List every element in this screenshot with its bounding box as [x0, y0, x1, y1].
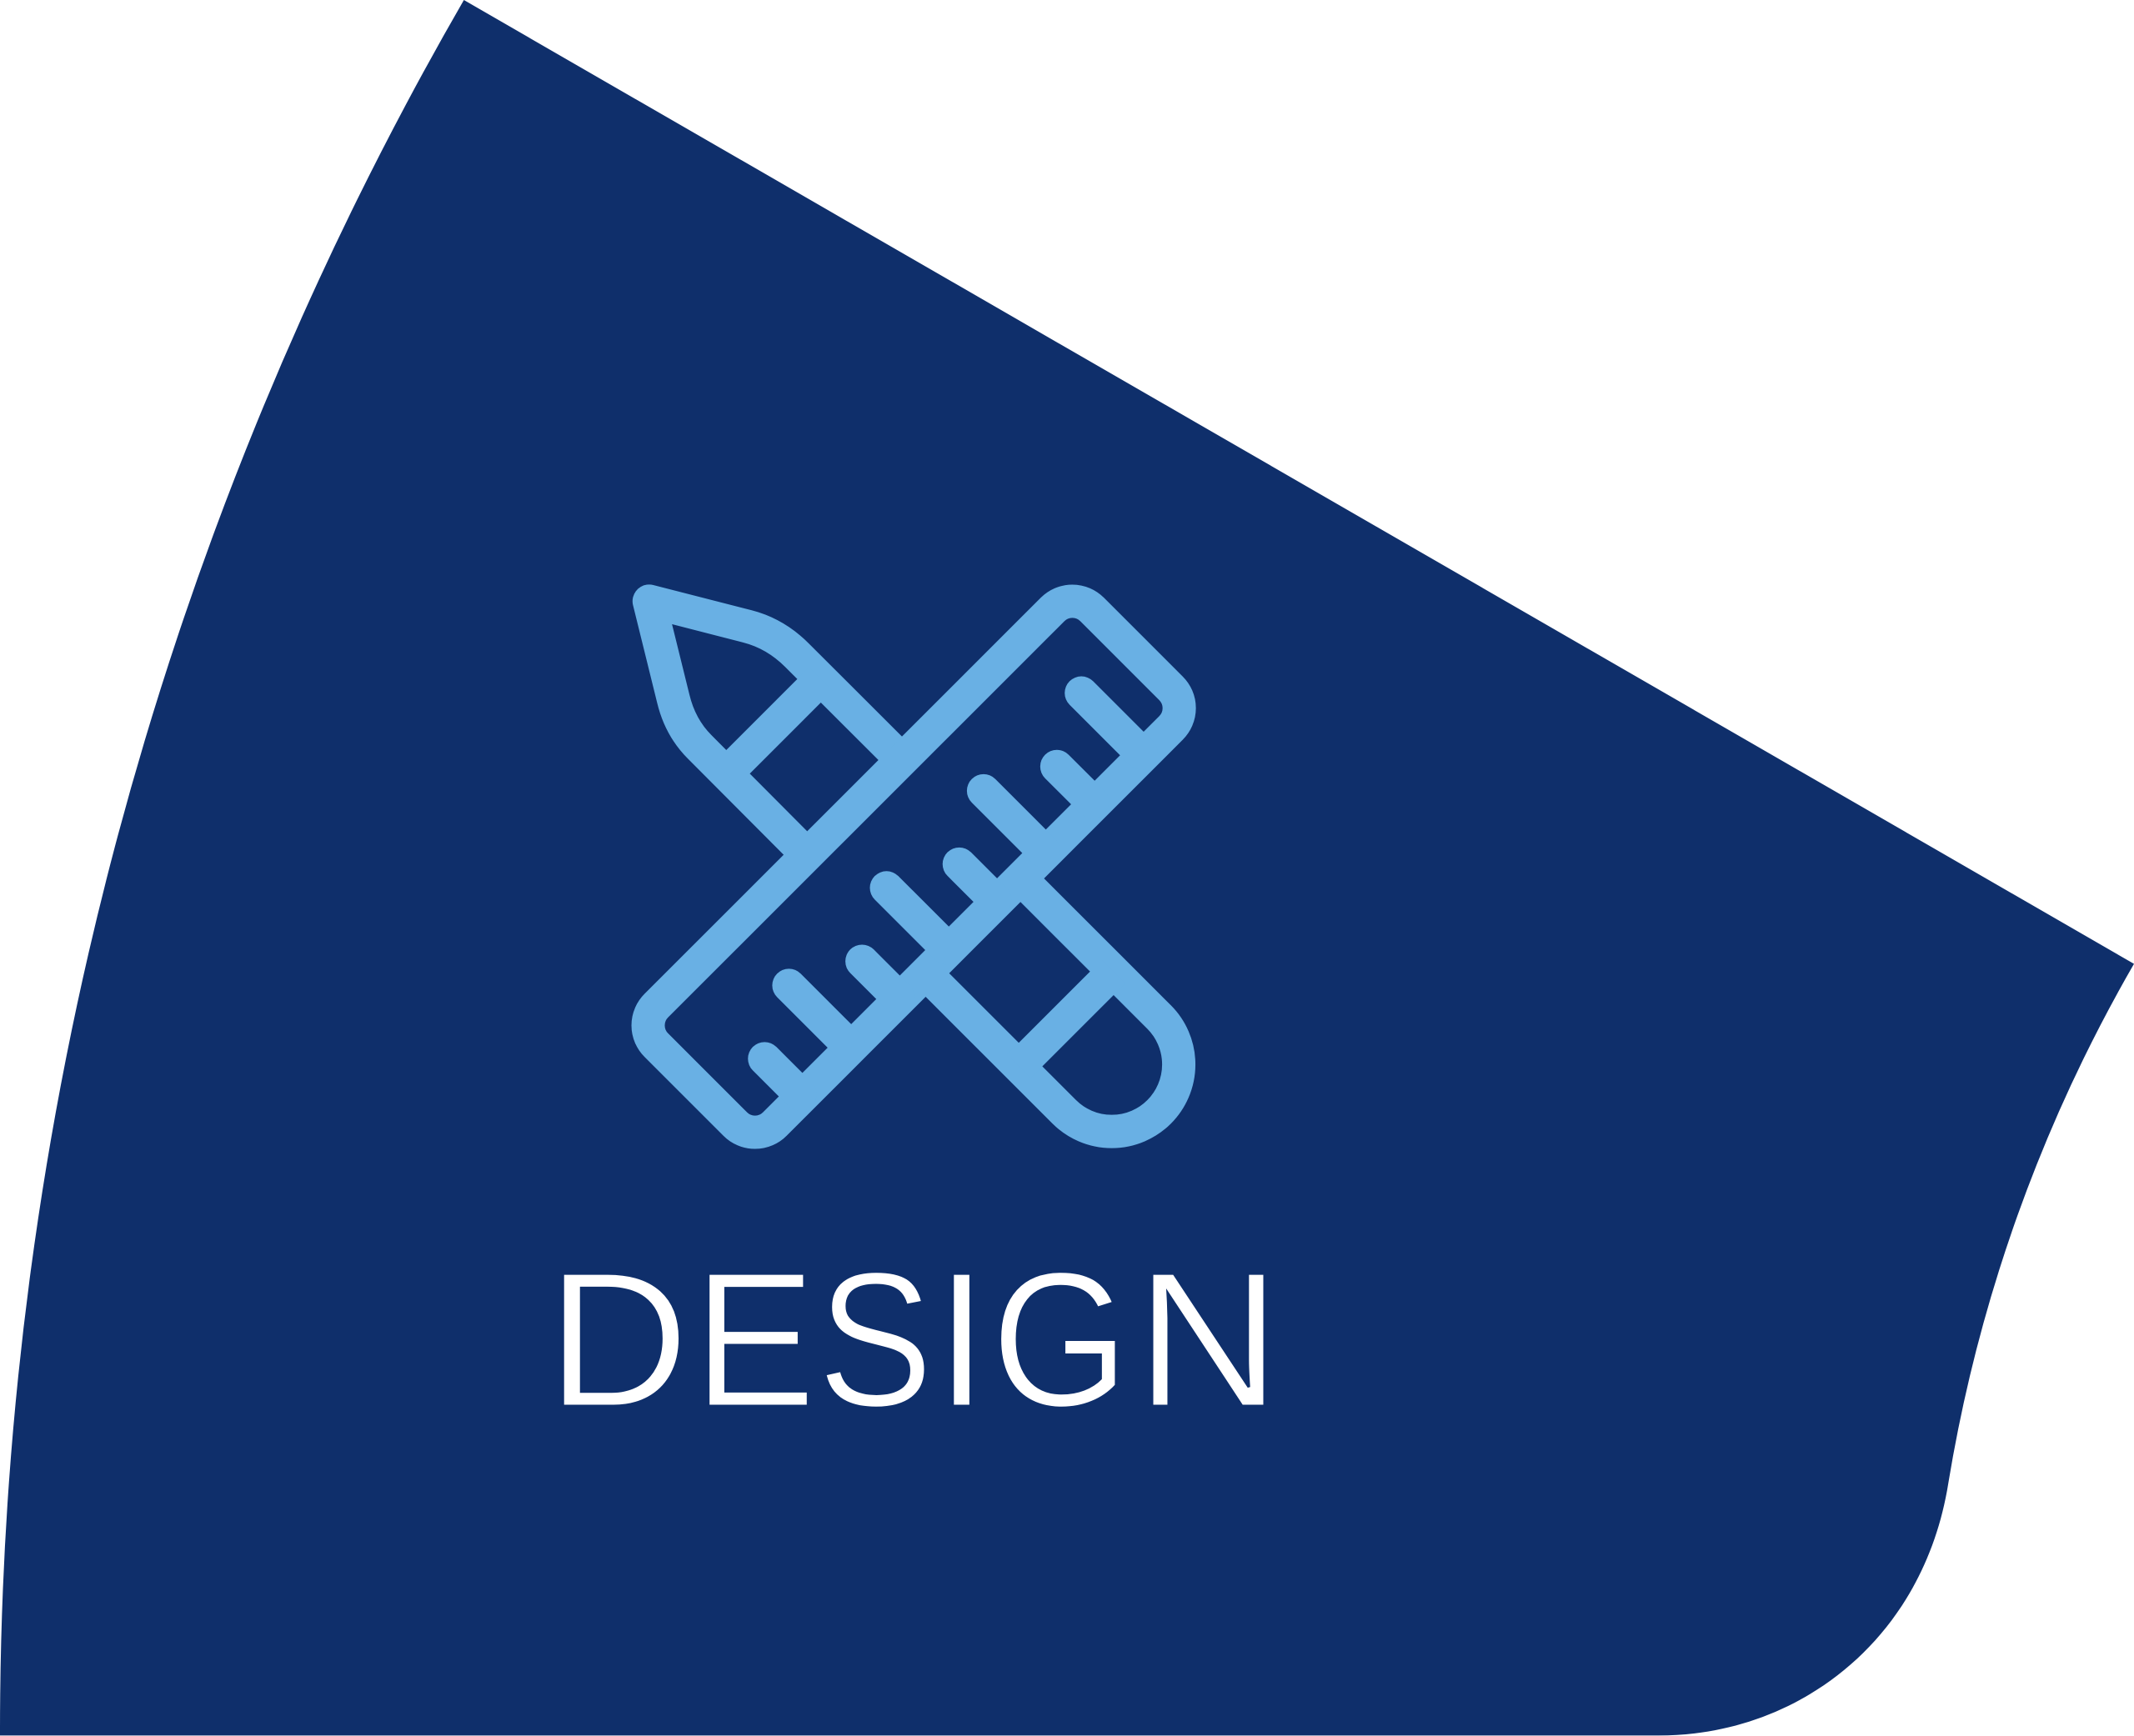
heading: DESIGN: N: [1135, 1232, 1281, 1447]
heading: DESIGN: E: [694, 1232, 816, 1447]
heading: DESIGN: D: [547, 1232, 689, 1447]
icon part: ruler body: [637, 590, 1191, 1143]
heading: DESIGN: S: [817, 1232, 933, 1447]
heading: DESIGN: I: [935, 1232, 989, 1447]
icon part: pencil upper section: [649, 601, 902, 855]
heading: DESIGN: [547, 1232, 1281, 1447]
icon part: ruler tick marks: [764, 693, 1141, 1094]
icon part: pencil lower section: [925, 878, 1179, 1132]
icon: crossed pencil and ruler: [637, 590, 1191, 1143]
heading: DESIGN: G: [991, 1232, 1130, 1447]
